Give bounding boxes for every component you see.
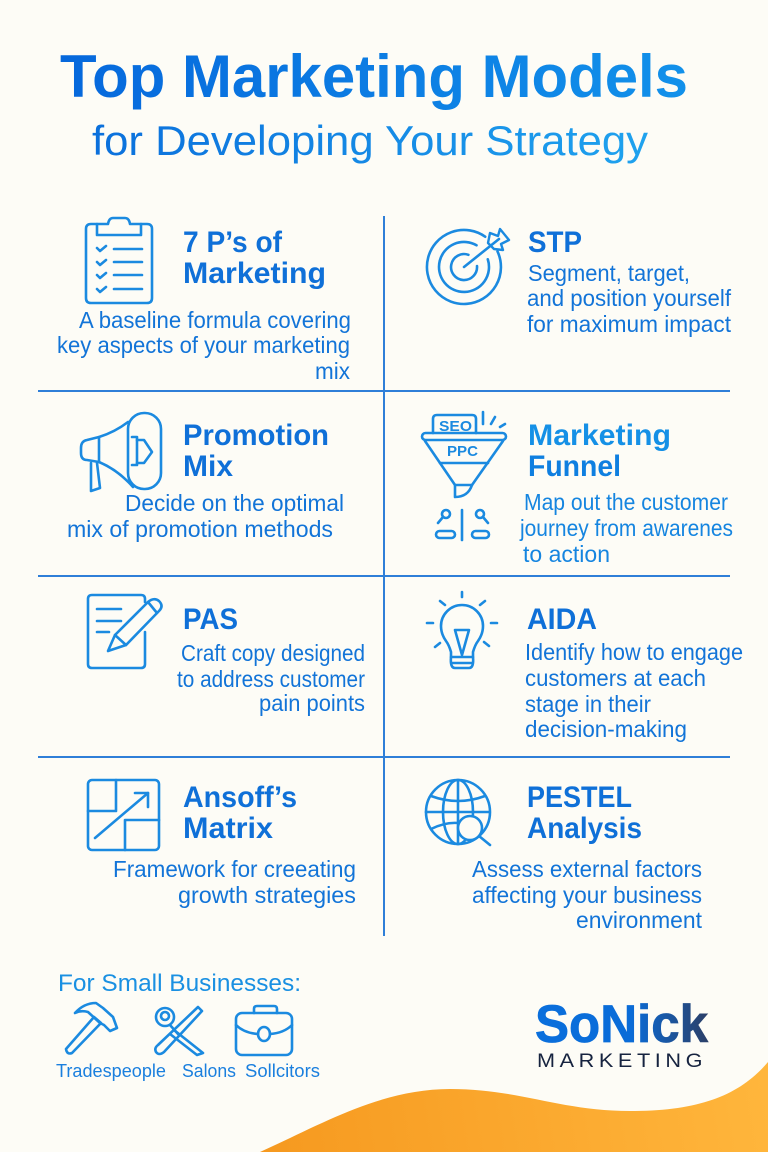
icon labels: Tradespeople xyxy=(56,1061,166,1081)
description: mix xyxy=(315,358,350,384)
icon: briefcase xyxy=(236,1006,292,1055)
description: Framework for creeating xyxy=(113,856,356,882)
description: key aspects of your marketing xyxy=(57,332,350,358)
heading xyxy=(183,226,326,290)
description: Assess external factors xyxy=(472,856,702,882)
icon: SEO PPC funnel: SEO xyxy=(439,418,472,435)
icon labels xyxy=(56,1061,320,1081)
heading xyxy=(183,781,297,845)
icon: SEO PPC funnel xyxy=(422,412,506,540)
icon: document and pencil xyxy=(88,595,162,668)
panel: PAS xyxy=(88,595,365,716)
heading: Analysis xyxy=(527,812,642,845)
icon: SEO PPC funnel: PPC xyxy=(447,443,478,460)
description: to action xyxy=(523,541,610,567)
title xyxy=(60,43,688,164)
description: and position yourself xyxy=(527,285,732,311)
icon labels: Sollcitors xyxy=(245,1061,320,1081)
panel: 7 P's of Marketing xyxy=(57,218,351,384)
description: pain points xyxy=(259,690,365,716)
description xyxy=(113,856,356,908)
heading: For Small Businesses: xyxy=(58,970,301,997)
description: mix of promotion methods xyxy=(67,516,333,542)
icon: target with arrow xyxy=(427,229,509,304)
description: affecting your business xyxy=(472,882,702,908)
heading: Marketing xyxy=(183,257,326,290)
heading xyxy=(183,419,329,483)
description: journey from awarenes xyxy=(519,515,733,541)
description: for maximum impact xyxy=(527,311,732,337)
icon: megaphone xyxy=(81,413,161,491)
description xyxy=(177,640,365,716)
icon: scissors and comb xyxy=(155,1007,203,1055)
icon: light bulb xyxy=(427,592,497,668)
panel: AIDA xyxy=(427,592,743,742)
panel: Ansoff's Matrix xyxy=(88,780,356,908)
description: Map out the customer xyxy=(524,489,728,515)
small businesses section xyxy=(56,970,320,1081)
description: stage in their xyxy=(525,691,651,717)
description: Segment, target, xyxy=(528,260,690,286)
description: Craft copy designed xyxy=(181,640,365,666)
heading: Marketing xyxy=(528,419,671,452)
title: for Developing Your Strategy xyxy=(92,117,648,164)
heading xyxy=(527,781,642,845)
description xyxy=(67,490,344,542)
description: A baseline formula covering xyxy=(79,307,351,333)
icon: globe with magnifier xyxy=(426,780,490,845)
heading: Mix xyxy=(183,450,233,483)
description xyxy=(519,489,733,567)
panel: Marketing Funnel xyxy=(422,412,733,567)
description: decision-making xyxy=(525,716,687,742)
title: Top Marketing Models xyxy=(60,43,688,110)
description xyxy=(525,639,743,742)
logo: SoNick Marketing: SoNick xyxy=(535,995,708,1054)
icon: growth matrix xyxy=(88,780,159,850)
heading: PESTEL xyxy=(527,781,632,814)
description: Identify how to engage xyxy=(525,639,743,665)
panel: Promotion Mix xyxy=(67,413,344,542)
heading: AIDA xyxy=(527,603,597,636)
heading: PAS xyxy=(183,603,238,636)
icon: hammer xyxy=(66,1003,117,1054)
description: to address customer xyxy=(177,666,365,692)
heading: 7 P’s of xyxy=(183,226,283,259)
heading: Matrix xyxy=(183,812,273,845)
icon labels: Salons xyxy=(182,1061,236,1081)
heading: Funnel xyxy=(528,450,621,483)
description: environment xyxy=(576,907,703,933)
heading: STP xyxy=(528,226,582,259)
heading xyxy=(528,419,671,483)
description xyxy=(472,856,703,933)
heading: Ansoff’s xyxy=(183,781,297,814)
description: Decide on the optimal xyxy=(125,490,344,516)
orange wave xyxy=(260,1062,768,1152)
description: growth strategies xyxy=(178,882,356,908)
description: customers at each xyxy=(525,665,706,691)
logo: SoNick Marketing: MARKETING xyxy=(537,1051,707,1072)
icon: clipboard checklist xyxy=(86,218,152,303)
description xyxy=(527,260,732,337)
description xyxy=(57,307,351,384)
panel: PESTEL Analysis xyxy=(426,780,703,933)
heading: Promotion xyxy=(183,419,329,452)
panel: STP xyxy=(427,226,732,337)
